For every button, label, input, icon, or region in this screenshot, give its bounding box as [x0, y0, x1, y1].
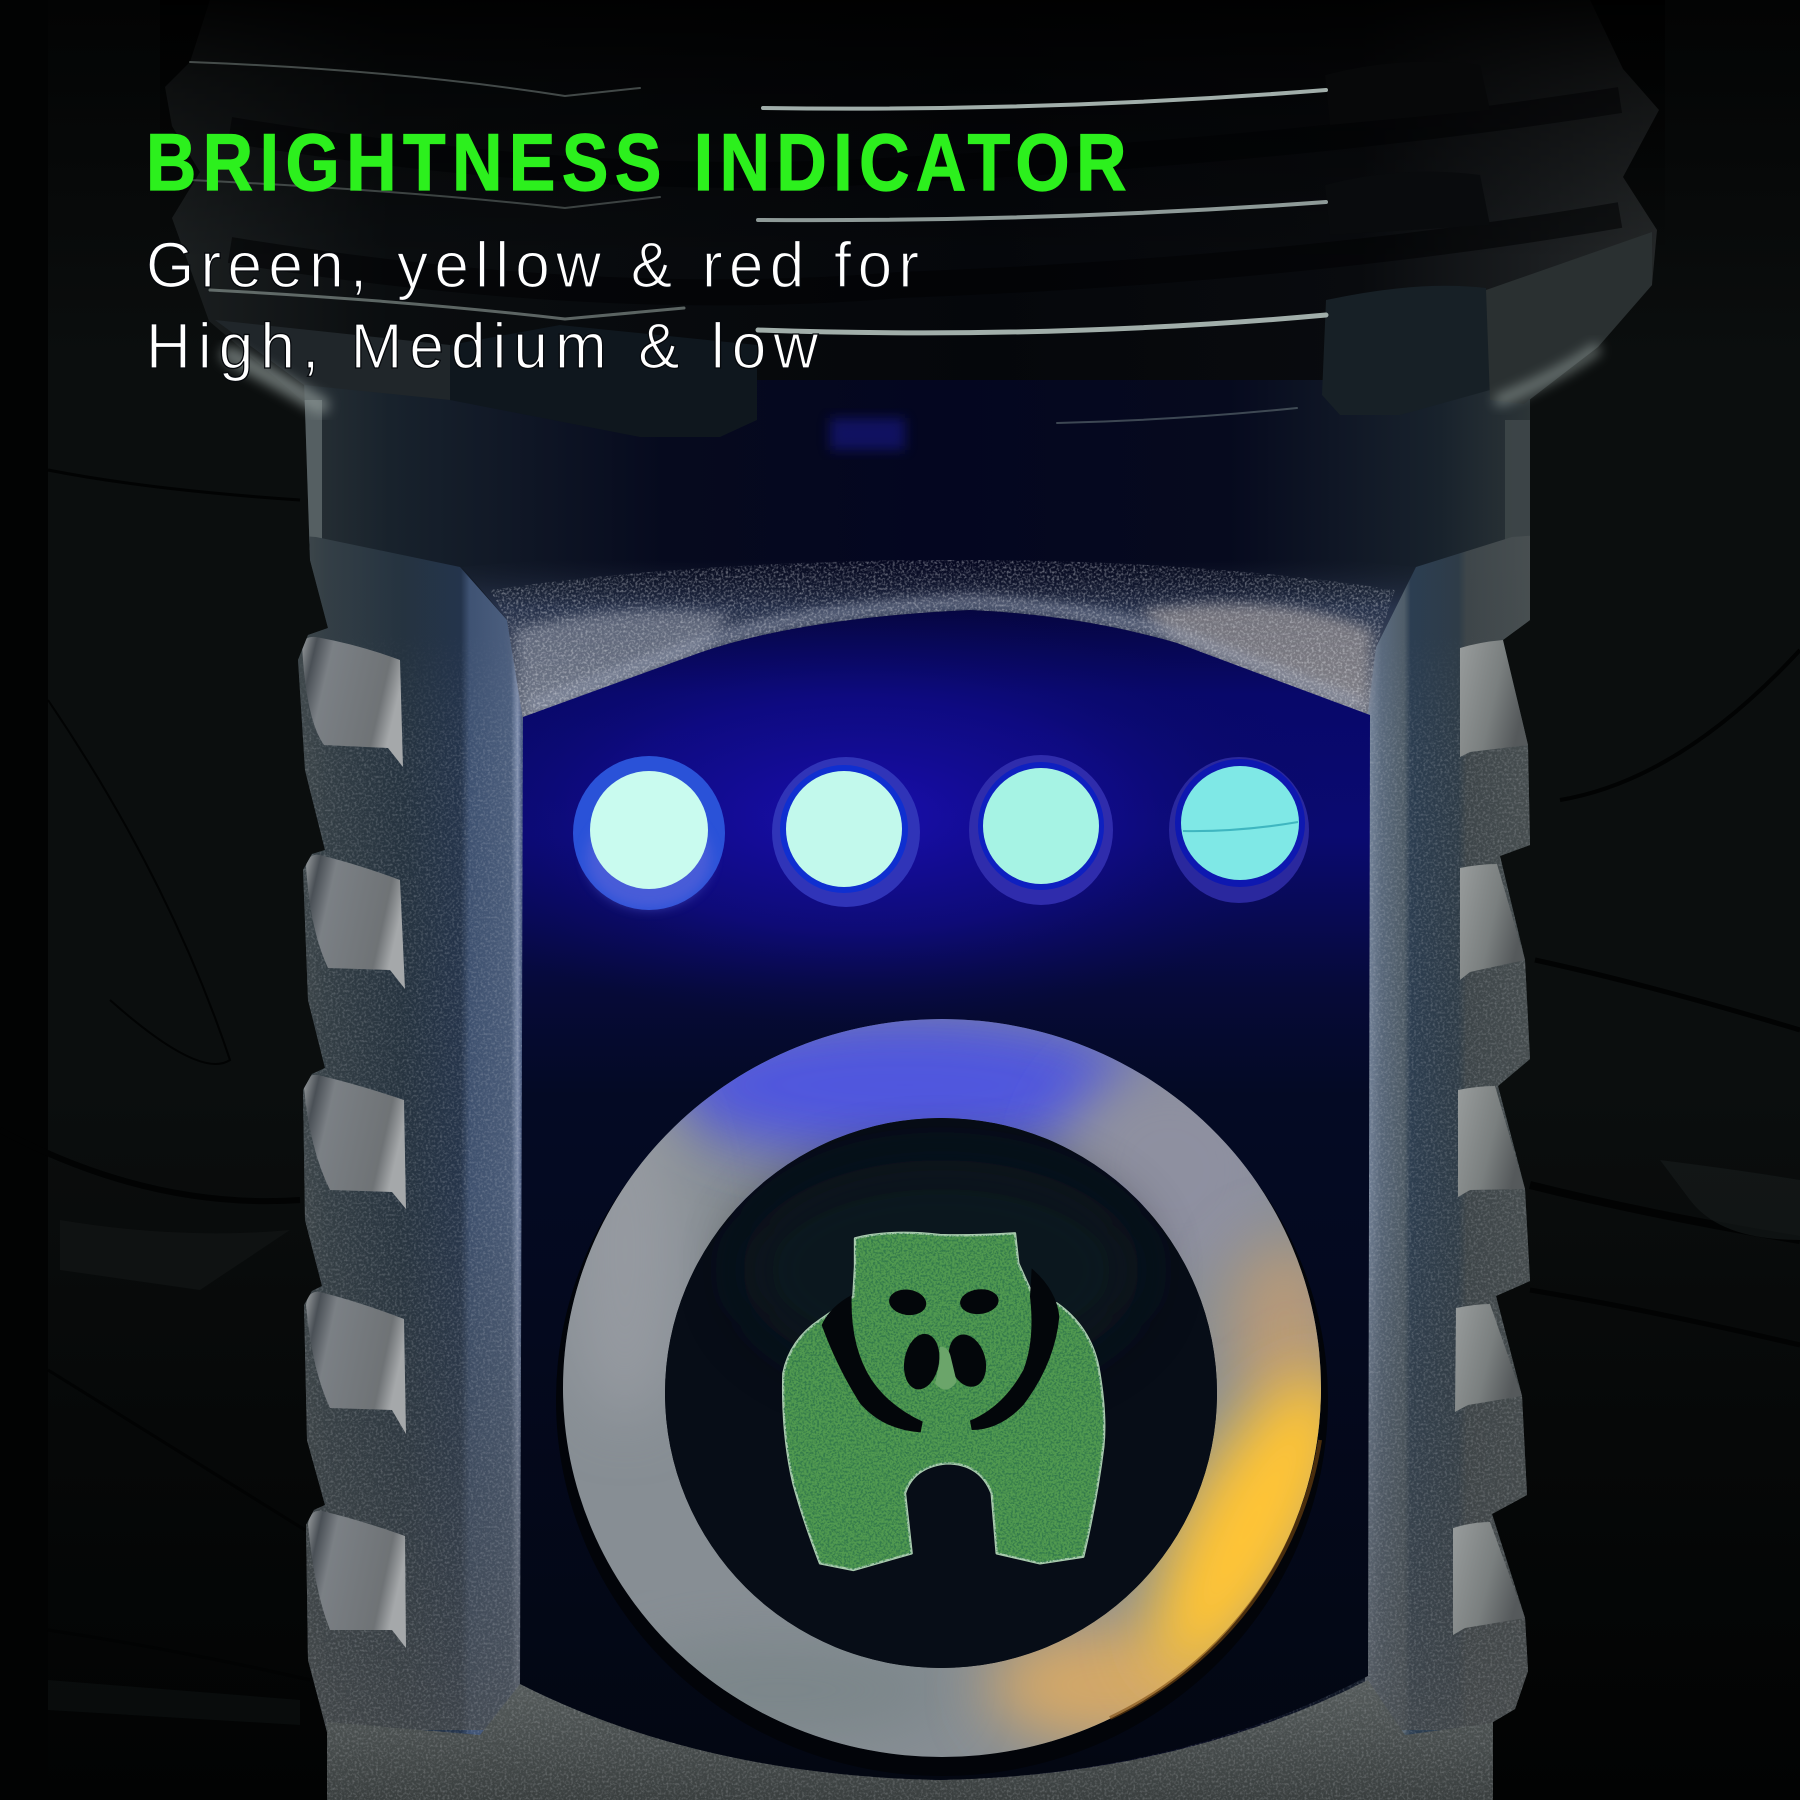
flashlight body: [290, 380, 1540, 1800]
button inner disc: [665, 1118, 1217, 1668]
right collar tabs: [1322, 62, 1652, 415]
arch grain: [491, 560, 1395, 716]
power button ring: [555, 1010, 1387, 1776]
subtitle text block: [146, 230, 919, 382]
left side rail: [290, 535, 525, 1800]
arch lit edge: [530, 602, 1362, 708]
lower body band: [320, 1680, 1500, 1800]
left collar tab: [450, 325, 757, 437]
body right lit edge: [1505, 420, 1530, 629]
subtitle text block: Green, yellow & red for: [146, 230, 919, 301]
right side rail: [1365, 536, 1530, 1735]
title: BRIGHTNESS INDICATOR: [146, 118, 1126, 208]
LED indicator 3: [969, 755, 1113, 905]
subtitle text block: High, Medium & low: [146, 311, 819, 382]
ring halo: [556, 1024, 1328, 1776]
body grain: [300, 660, 1530, 1800]
LED indicator 1: [573, 756, 725, 910]
LED indicator 4: [1169, 757, 1309, 903]
body left lit edge: [304, 400, 322, 550]
textured arch above LED window: [472, 574, 1409, 719]
collar grooves: [230, 100, 1620, 292]
left fins: [302, 637, 406, 1648]
collar lower tabs and thread highlights: [190, 62, 1652, 450]
LED indicator 2: [772, 757, 920, 907]
blue reflection at top of body: [830, 418, 905, 450]
arch corner shading: [515, 610, 730, 717]
icon: green gorilla logo: [773, 1220, 1113, 1577]
flashlight collar with threads: [160, 0, 1665, 404]
ring rim: [1110, 1440, 1320, 1718]
right fins: [1453, 640, 1528, 1635]
display panel with glow: [520, 610, 1370, 1780]
